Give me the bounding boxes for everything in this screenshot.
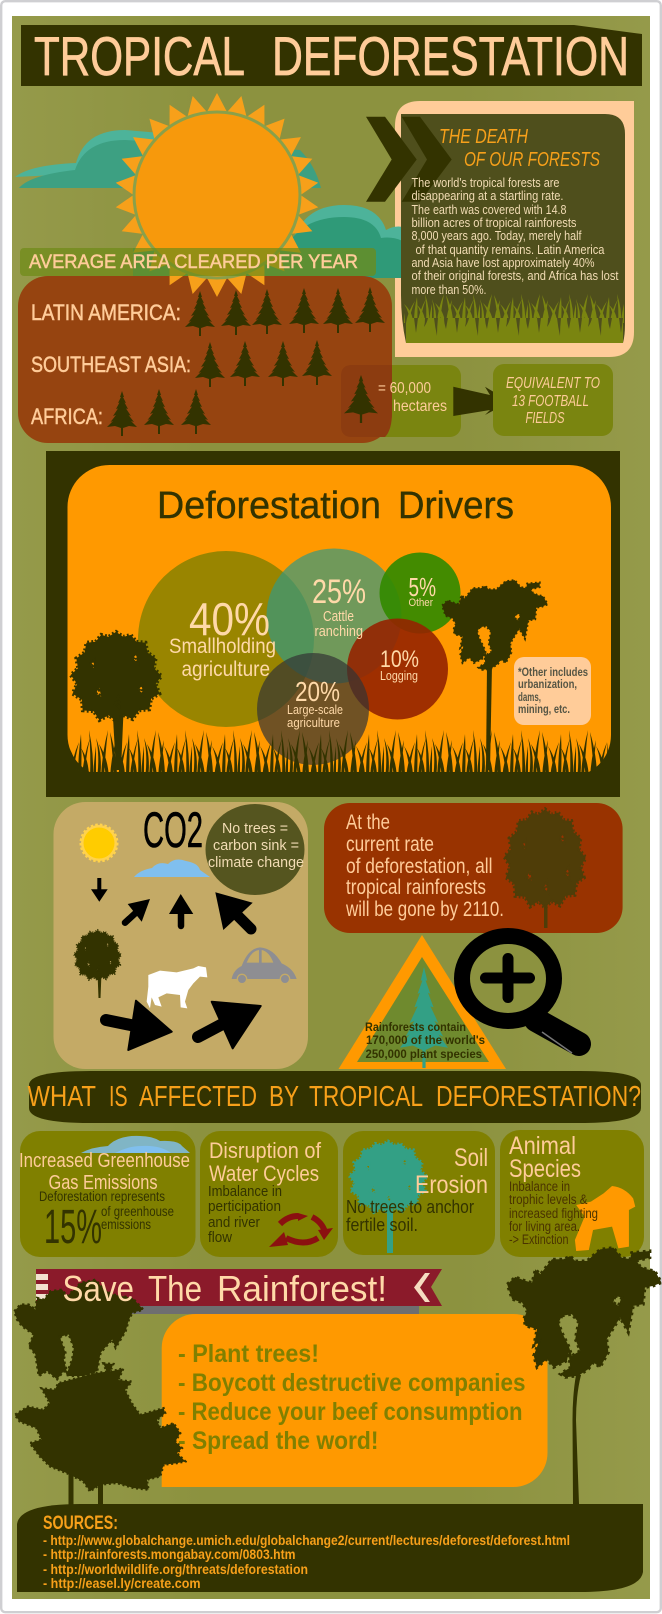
icon: tree xyxy=(504,809,586,928)
label: 5% other: Other xyxy=(408,597,433,609)
note: other includes: mining, etc. xyxy=(518,704,570,716)
intro paragraph xyxy=(412,175,619,297)
banner: what is affected: AFFECTED xyxy=(139,1081,257,1113)
intro paragraph: 8,000 years ago. Today, merely half xyxy=(412,228,582,243)
heading: deforestation drivers xyxy=(157,485,514,527)
panel: actions list: - Reduce your beef consumption xyxy=(178,1398,522,1426)
arrow: hectares to football fields xyxy=(453,387,510,416)
panel: sources: - http://rainforests.mongabay.com/0803.htm xyxy=(43,1547,296,1562)
panel: animal species: increased fighting xyxy=(509,1206,598,1221)
label: 10% logging xyxy=(380,646,419,683)
arrow: sun down xyxy=(91,878,108,902)
panel: all rainforests gone by 2110 xyxy=(324,803,623,933)
circle: cattle ranching xyxy=(266,548,402,684)
intro paragraph: of that quantity remains. Latin America xyxy=(416,242,605,257)
panel: water cycles: Imbalance in xyxy=(208,1183,282,1200)
label: africa: AFRICA: xyxy=(31,404,103,429)
label: latin america: LATIN AMERICA: xyxy=(31,300,181,325)
panel: greenhouse gas emissions: Deforestation represents xyxy=(39,1189,165,1204)
panel: water cycles: and river xyxy=(208,1214,260,1231)
panel: greenhouse gas emissions: emissions xyxy=(101,1217,151,1232)
icon: clouds xyxy=(81,1136,190,1153)
icon: car xyxy=(232,947,297,984)
callout: no trees: No trees = xyxy=(222,820,288,837)
banner: what is affected: WHAT xyxy=(28,1081,96,1113)
icon: small sun xyxy=(81,825,117,861)
circle: logging xyxy=(347,618,448,720)
panel: all rainforests gone by 2110: At the xyxy=(346,811,390,834)
note: other includes: dams, xyxy=(518,692,541,704)
intro paragraph: more than 50%. xyxy=(412,282,486,297)
label: 10% logging: Logging xyxy=(380,668,418,683)
label: 25% cattle ranching: ranching xyxy=(314,623,363,640)
panel: water cycles: Disruption of xyxy=(209,1138,322,1163)
callout: no trees: climate change xyxy=(208,854,304,871)
arrow: big right xyxy=(106,1001,172,1050)
panel: animal species: trophic levels & xyxy=(509,1192,588,1207)
panel: greenhouse gas emissions: of greenhouse xyxy=(101,1204,174,1219)
panel: soil erosion xyxy=(343,1131,495,1255)
heading: save the rainforest: The xyxy=(148,1268,202,1309)
panel: greenhouse gas emissions: Increased Greenhouse xyxy=(19,1150,190,1172)
label: 20% large-scale agriculture: Large-scale xyxy=(287,702,343,717)
heading: save the rainforest xyxy=(62,1268,387,1309)
circle: smallholding agriculture xyxy=(138,551,314,727)
label: 40% smallholding agriculture: 40% xyxy=(189,593,270,645)
grass strip xyxy=(404,293,624,343)
label: 5% other: 5% xyxy=(408,572,436,602)
panel: animal species: -> Extinction xyxy=(509,1232,568,1247)
panel: animal species: Species xyxy=(509,1155,581,1183)
panel: actions list: - Plant trees! xyxy=(178,1340,319,1368)
circle: other xyxy=(380,552,460,634)
arrow: up xyxy=(169,894,193,926)
panel: water cycles xyxy=(200,1131,338,1257)
label: 20% large-scale agriculture: agriculture xyxy=(287,715,340,730)
callout: no trees: carbon sink = xyxy=(213,837,299,854)
label: co2: CO2 xyxy=(143,802,203,858)
panel: animal species xyxy=(500,1130,644,1257)
callout: equivalent to 13 football fields xyxy=(493,364,613,436)
tree row: latin america xyxy=(185,287,385,336)
label: 20% large-scale agriculture: 20% xyxy=(295,676,340,707)
callout: no trees xyxy=(206,804,304,895)
panel: water cycles: perticipation xyxy=(208,1198,281,1215)
intro paragraph: of their original forests, and Africa has lost xyxy=(412,268,619,283)
arrow: big up right xyxy=(198,1002,261,1048)
tree silhouette right xyxy=(442,580,548,770)
label: southeast asia: SOUTHEAST ASIA: xyxy=(31,352,191,377)
tree silhouettes bottom left xyxy=(14,1280,185,1506)
callout: equivalent to 13 football fields: EQUIVALENT TO xyxy=(506,375,600,392)
stat: 15%: 15% xyxy=(44,1201,102,1254)
arrow: tree up right xyxy=(125,899,150,923)
panel: actions list: - Spread the word! xyxy=(178,1427,378,1455)
banner: save the rainforest ribbon xyxy=(36,1269,442,1314)
icon: cow xyxy=(147,966,207,1008)
intro paragraph: and Asia have lost approximately 40% xyxy=(412,255,595,270)
title bar xyxy=(21,25,642,87)
heading: deforestation drivers: Deforestation xyxy=(157,485,381,527)
panel: actions list: - Boycott destructive companies xyxy=(178,1369,526,1397)
heading: the death of our forests xyxy=(439,126,601,171)
label: 10% logging: 10% xyxy=(380,646,419,673)
icon: recycle arrows xyxy=(269,1213,333,1247)
label: 40% smallholding agriculture: Smallholding xyxy=(169,635,276,658)
legend box overlap on brown xyxy=(341,365,392,437)
label: 25% cattle ranching xyxy=(312,573,366,640)
panel: all rainforests gone by 2110: will be gone by 2110. xyxy=(345,898,504,921)
label: 20% large-scale agriculture xyxy=(287,676,343,730)
panel: sources: SOURCES: xyxy=(43,1513,118,1534)
panel: animal species: Inbalance in xyxy=(509,1179,570,1194)
label: 25% cattle ranching: Cattle xyxy=(323,608,354,625)
arrow: car up left xyxy=(215,892,253,930)
banner: what is affected xyxy=(28,1071,641,1123)
panel: greenhouse gas emissions xyxy=(19,1131,196,1257)
panel: soil erosion: Erosion xyxy=(415,1171,488,1199)
panel: sources xyxy=(17,1504,643,1592)
panel: carbon cycle xyxy=(54,802,308,1069)
panel: actions list xyxy=(162,1314,547,1487)
icon: tree xyxy=(74,930,121,998)
label: 5% other xyxy=(408,572,436,609)
panel: soil erosion: No trees to anchor xyxy=(346,1197,474,1217)
icon: triangle plant species fact: 250,000 plant species xyxy=(366,1047,482,1061)
panel: sources: - http://worldwildlife.org/threats/deforestation xyxy=(43,1562,308,1577)
note: other includes: urbanization, xyxy=(518,679,577,691)
panel: all rainforests gone by 2110: current rate xyxy=(346,833,434,856)
panel: water cycles: Water Cycles xyxy=(209,1161,319,1186)
icon: triangle plant species fact xyxy=(338,935,506,1069)
banner: what is affected: TROPICAL xyxy=(309,1081,423,1113)
panel: animal species: Animal xyxy=(509,1132,576,1160)
icon: sun xyxy=(115,93,319,297)
panel: animal species: for living area. xyxy=(509,1219,580,1234)
heading: deforestation drivers: Drivers xyxy=(398,485,514,527)
panel: all rainforests gone by 2110: of deforestation, all xyxy=(346,855,492,878)
banner: average area cleared per year: AVERAGE AREA CLEARED PER YEAR xyxy=(29,252,358,273)
intro paragraph: billion acres of tropical rainforests xyxy=(412,215,577,230)
icon: gorilla xyxy=(575,1186,635,1251)
icon: magnifier xyxy=(462,936,579,1053)
note: other includes: *Other includes xyxy=(518,667,588,679)
panel: average area cleared per year xyxy=(18,276,392,443)
panel: soil erosion: fertile soil. xyxy=(346,1215,418,1235)
circle: large-scale agriculture xyxy=(257,653,369,765)
icon: teal tree xyxy=(349,1141,427,1253)
tree row: southeast asia xyxy=(195,340,332,387)
panel: sources: - http://easel.ly/create.com xyxy=(43,1576,200,1591)
label: 40% smallholding agriculture: agriculture xyxy=(182,658,270,681)
icon: clouds behind sun xyxy=(15,130,415,278)
banner: what is affected: IS xyxy=(109,1081,128,1113)
legend box background xyxy=(341,365,461,437)
panel: deforestation drivers xyxy=(46,451,620,797)
heading: save the rainforest: Save xyxy=(62,1268,134,1309)
legend: tree equals 60,000 hectares: = 60,000 xyxy=(378,380,431,397)
callout: equivalent to 13 football fields: 13 FOOTBALL xyxy=(512,393,589,410)
icon: double chevron xyxy=(366,117,452,202)
intro paragraph: The world's tropical forests are xyxy=(412,175,560,190)
label: 40% smallholding agriculture xyxy=(169,593,276,681)
panel: soil erosion: Soil xyxy=(454,1144,488,1172)
icon: blue cloud xyxy=(134,860,210,877)
tree silhouette left xyxy=(71,632,161,770)
icon: triangle plant species fact: 170,000 of the world's xyxy=(366,1033,485,1047)
heading: save the rainforest: Rainforest! xyxy=(217,1268,387,1309)
legend: tree equals 60,000 hectares: hectares xyxy=(393,398,447,415)
tree row: africa xyxy=(107,389,211,436)
title bar: TROPICAL xyxy=(34,25,245,87)
intro paragraph: disappearing at a startling rate. xyxy=(412,188,564,203)
legend: tree equals 60,000 hectares xyxy=(344,375,447,423)
intro paragraph: The earth was covered with 14.8 xyxy=(412,202,566,217)
panel: sources: - http://www.globalchange.umich.edu/globalchange2/current/lectures/deforest/deforest.html xyxy=(43,1533,570,1548)
panel: all rainforests gone by 2110: tropical rainforests xyxy=(346,876,486,899)
panel: greenhouse gas emissions: Gas Emissions xyxy=(48,1172,158,1194)
tree silhouette bottom right xyxy=(507,1248,662,1504)
panel: water cycles: flow xyxy=(208,1229,232,1246)
note: other includes xyxy=(514,657,591,725)
label: 25% cattle ranching: 25% xyxy=(312,573,366,611)
heading: the death of our forests: OF OUR FORESTS xyxy=(464,149,601,171)
grass silhouette xyxy=(46,728,620,797)
panel: the death of our forests backing xyxy=(395,101,634,357)
heading: the death of our forests: THE DEATH xyxy=(439,126,528,148)
panel: dark intro box xyxy=(401,114,625,343)
callout: equivalent to 13 football fields: FIELDS xyxy=(526,410,565,427)
banner: what is affected: BY xyxy=(269,1081,299,1113)
icon: triangle plant species fact: Rainforests contain xyxy=(365,1020,466,1034)
